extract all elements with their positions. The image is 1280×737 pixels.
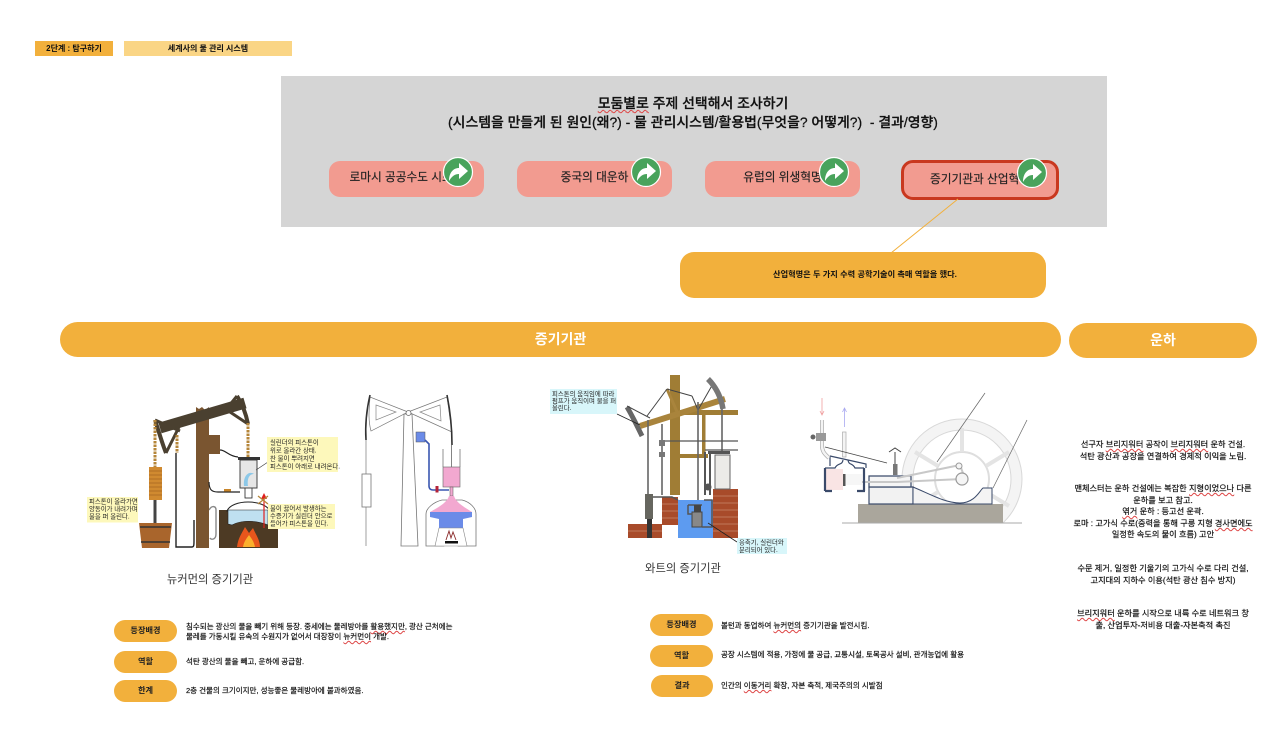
- button: Roman aqueduct: [329, 161, 484, 197]
- callout: cylinder note: [267, 437, 340, 472]
- callout: bucket note: 물을 퍼 올린다.: [89, 512, 130, 520]
- governor: [889, 448, 901, 473]
- callout: boiler note: 수증기가 실린더 안으로: [270, 511, 332, 520]
- panel heading: (시스템을 만들게 된 원인(왜?) - 물 관리시스템/활용법(무엇을? 어떻게?) - 결과/영향): [448, 114, 938, 130]
- callout: condenser note: 응축기, 실린더와: [739, 538, 784, 546]
- label: background: 등장배경: [666, 620, 697, 629]
- callout: condenser note: 분리되어 있다.: [739, 545, 778, 554]
- canal text column: [1073, 440, 1253, 630]
- canal paragraph 2: 로마 : 고가식 수로(중력을 통해 구릉 지형 경사면에도: [1073, 519, 1253, 528]
- cylinder: [708, 451, 730, 454]
- label: role: 역할: [674, 651, 689, 660]
- button: steam engine and industrial revolution (selected): 증기기관과 산업혁명: [930, 173, 1030, 186]
- button: Chinese grand canal: 중국의 대운하: [561, 171, 628, 184]
- text: limit: 2층 건물의 크기이지만, 성능좋은 물레방아에 불과하였음.: [186, 686, 363, 695]
- text: background: 물레를 가동시킬 유속의 수원지가 없어서 대장장이 뉴커먼이 개발.: [186, 632, 389, 641]
- canal paragraph 2: 운하를 보고 참고.: [1133, 496, 1193, 505]
- button: Roman aqueduct: 로마시 공공수도 시스템: [349, 171, 464, 184]
- heading bar: steam engine: 증기기관: [535, 331, 586, 347]
- flywheel: [908, 424, 1016, 534]
- callout: pump note: 피스톤의 움직임에 따라: [552, 389, 614, 398]
- cylinder: [245, 488, 252, 498]
- panel heading: [448, 95, 938, 130]
- canal paragraph 1: [1080, 440, 1246, 461]
- beam: [155, 396, 248, 453]
- canal paragraph 3: [1077, 564, 1249, 585]
- button: European sanitation revolution: [705, 161, 860, 197]
- boiler: [227, 502, 270, 511]
- text: background: 볼턴과 동업하여 뉴커먼의 증기기관을 발전시킴.: [721, 621, 869, 630]
- connector line to callout: [892, 198, 958, 252]
- Watt detail rows: [650, 614, 964, 697]
- water tank: [416, 432, 425, 442]
- canal paragraph 4: 출, 산업투자-저비용 대출-자본축적 촉진: [1095, 620, 1231, 630]
- heading bar: steam engine: [60, 322, 1061, 357]
- illustration: Watt engine, colour: [550, 375, 787, 554]
- topic tag: 세계사의 물 관리 시스템: [168, 44, 248, 53]
- icon: arrow on button 3: [818, 156, 850, 188]
- icon: arrow on button 4: [1016, 158, 1048, 188]
- boiler: [426, 500, 476, 546]
- button: steam engine and industrial revolution (selected): [901, 160, 1059, 200]
- rod and pipes: [176, 453, 194, 547]
- panel heading: 모둠별로 주제 선택해서 조사하기: [598, 95, 788, 111]
- callout: bucket note: 양동이가 내려가며: [89, 504, 138, 513]
- weight and bucket: [149, 467, 162, 500]
- cylinder: [443, 449, 460, 467]
- illustration: Newcomen engine, colour: [87, 394, 340, 548]
- callout: cylinder note: 피스톤이 아래로 내려온다.: [270, 462, 340, 470]
- canal paragraph 4: 브리지워터 운하를 시작으로 내륙 수로 네트워크 창: [1077, 609, 1249, 618]
- pipes: [822, 420, 829, 458]
- label: limit: [114, 680, 177, 702]
- leader lines: [617, 414, 737, 542]
- callout: cylinder note: 실린더의 피스톤이: [270, 438, 319, 446]
- callout: pump note: 올린다.: [552, 403, 572, 412]
- text: role: 공장 시스템에 적용, 가정에 물 공급, 교통시설, 토목공사 설비, 관개농업에 활용: [721, 650, 964, 659]
- pedestal: [869, 487, 913, 504]
- callout: pump note: 펌프가 움직이며 물을 퍼: [552, 396, 616, 405]
- callout: bucket note: 피스톤이 올라가면: [89, 496, 138, 506]
- callout: cylinder note: 찬 물이 뿌려지면: [270, 454, 315, 462]
- icon: arrow on button 2: [630, 156, 662, 188]
- bricks: [662, 497, 678, 525]
- chains: [155, 420, 248, 467]
- heading bar: canal: [1069, 323, 1257, 358]
- canal paragraph 2: 일정한 속도의 물이 흐름) 고안: [1112, 530, 1214, 539]
- text: result: 인간의 이동거리 확장, 자본 축적, 제국주의의 시발점: [721, 681, 883, 690]
- cylinder: [826, 469, 843, 490]
- callout: boiler note: 물이 끓어서 발생하는: [270, 504, 327, 512]
- label: result: 결과: [674, 681, 690, 690]
- button: Chinese grand canal: [517, 161, 672, 197]
- canal paragraph 2: 엮거 운하 : 등고선 운곽.: [1122, 507, 1204, 516]
- label: background: [114, 620, 177, 642]
- connecting rods: [845, 465, 964, 482]
- base: [858, 504, 1003, 523]
- icon: arrow on button 1: [442, 156, 474, 188]
- canal paragraph 1: 선구자 브리지워터 공작이 브리지워터 운하 건설.: [1081, 440, 1245, 449]
- condenser: [692, 512, 702, 527]
- furnace: [219, 510, 278, 548]
- heading bar: canal: 운하: [1150, 332, 1176, 348]
- label: limit: 한계: [138, 686, 153, 695]
- callout: industrial revolution note: [680, 252, 1046, 298]
- callout: boiler note: 들어가 피스톤을 민다.: [270, 518, 328, 528]
- illustration: Newcomen engine, diagram: [362, 394, 476, 546]
- canal paragraph 4: [1077, 608, 1249, 630]
- topic tag: [124, 41, 292, 56]
- flow arrows: [820, 398, 824, 415]
- label: role: 역할: [138, 657, 153, 666]
- callout: pump note: [550, 389, 617, 414]
- label: role: [114, 651, 177, 673]
- furnace flame: [435, 528, 467, 546]
- callout: bucket note: [87, 496, 138, 522]
- pump: [645, 494, 653, 519]
- callout: industrial revolution note: 산업혁명은 두 가지 수력 공학기술이 촉매 역할을 했다.: [773, 270, 957, 279]
- label: result: [651, 675, 713, 697]
- caption: Newcomen: 뉴커먼의 증기기관: [167, 574, 253, 586]
- canal paragraph 3: 고지대의 지하수 이용(석탄 광산 침수 방지): [1091, 576, 1235, 585]
- text: background: [186, 622, 453, 644]
- callout: cylinder note: 위로 올라간 상태.: [270, 446, 317, 454]
- red arrow: [263, 497, 265, 528]
- label: role: [650, 645, 713, 667]
- step tag: [35, 41, 113, 56]
- Newcomen detail rows: [114, 620, 453, 702]
- illustration: Watt engine, side view: [810, 392, 1028, 524]
- caption: Watt: 와트의 증기기관: [645, 563, 721, 575]
- canal paragraph 3: 수문 제거, 일정한 기울기의 고가식 수로 다리 건설,: [1077, 564, 1249, 573]
- button: European sanitation revolution: 유럽의 위생혁명: [743, 171, 822, 184]
- canal paragraph 1: 석탄 광산과 공장을 연결하여 경제적 이익을 노림.: [1080, 452, 1246, 461]
- step tag: 2단계 : 탐구하기: [46, 44, 102, 53]
- label: background: [650, 614, 713, 636]
- callout: condenser note: [737, 538, 787, 554]
- water: [678, 500, 713, 538]
- panel: module topic selection: [281, 76, 1107, 227]
- post: [196, 407, 209, 548]
- canal paragraph 2: 맨체스터는 운하 건설에는 복잡한 지형이었으나 다른: [1074, 484, 1252, 493]
- callout: boiler note: [268, 504, 335, 529]
- text: background: 침수되는 광산의 물을 빼기 위해 등장. 중세에는 물레방아를 활용했지만, 광산 근처에는: [186, 622, 453, 631]
- text: role: 석탄 광산의 물을 빼고, 운하에 공급함.: [186, 657, 304, 666]
- canal paragraph 2: [1073, 484, 1253, 539]
- label: background: 등장배경: [130, 626, 161, 635]
